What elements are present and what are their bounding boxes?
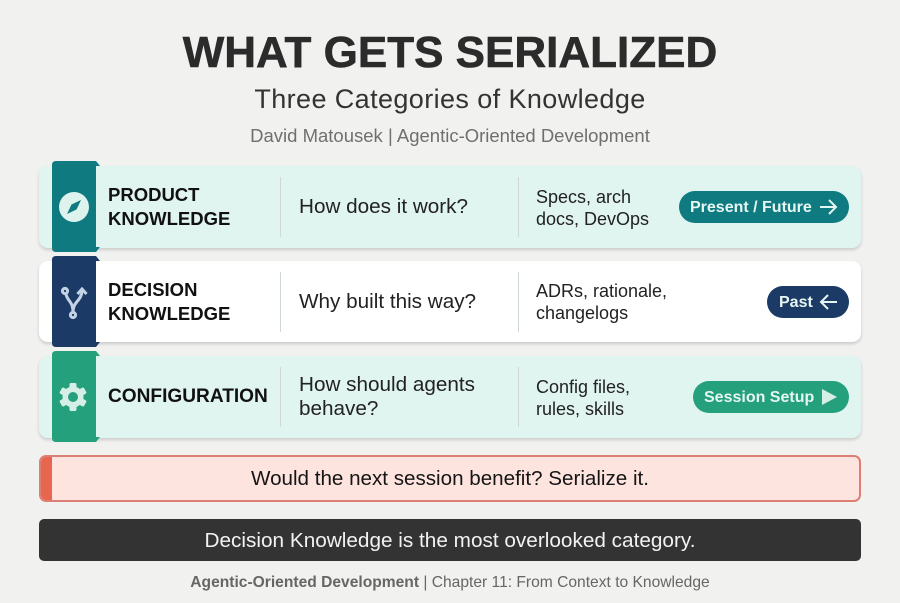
- artifacts: Config files,: [536, 377, 630, 397]
- category name: PRODUCT: [108, 184, 199, 205]
- badge: past: [767, 286, 849, 318]
- artifacts: [536, 187, 649, 229]
- artifacts: rules, skills: [536, 399, 624, 419]
- divider: [280, 272, 281, 332]
- panel: decision knowledge: [38, 256, 862, 347]
- artifacts: [536, 281, 667, 323]
- icon: branch: [60, 286, 88, 320]
- category name: DECISION: [108, 279, 197, 300]
- badge: session setup: [693, 381, 849, 413]
- author line: David Matousek | Agentic-Oriented Development: [250, 125, 650, 146]
- badge: present / future: [679, 191, 849, 223]
- artifacts: docs, DevOps: [536, 209, 649, 229]
- question: [299, 373, 475, 420]
- footer: Agentic-Oriented Development | Chapter 11: From Context to Knowledge: [190, 574, 710, 591]
- card background: [39, 261, 861, 342]
- card background: [39, 356, 861, 438]
- colour strip: [52, 161, 100, 252]
- category name: KNOWLEDGE: [108, 303, 230, 324]
- callout: serialize rule: [39, 455, 861, 502]
- panel: configuration: [38, 351, 862, 442]
- category name: KNOWLEDGE: [108, 208, 230, 229]
- divider: [280, 367, 281, 427]
- title: WHAT GETS SERIALIZED: [183, 28, 717, 77]
- panel: product knowledge: [38, 161, 862, 252]
- banner text: Decision Knowledge is the most overlooked category.: [205, 529, 695, 552]
- artifacts: changelogs: [536, 303, 628, 323]
- badge: session setup: Session Setup: [704, 389, 814, 406]
- divider: [518, 367, 519, 427]
- question: How does it work?: [299, 195, 468, 218]
- takeaway banner: [39, 519, 861, 561]
- divider: [280, 177, 281, 237]
- subtitle: Three Categories of Knowledge: [254, 84, 646, 114]
- category name: CONFIGURATION: [108, 386, 268, 407]
- divider: [518, 272, 519, 332]
- accent bar: [39, 455, 52, 506]
- badge: present / future: Present / Future: [690, 199, 812, 216]
- badge: past: Past: [779, 294, 813, 311]
- colour strip: [52, 256, 100, 347]
- question: behave?: [299, 397, 378, 420]
- category name: [108, 279, 230, 324]
- question: How should agents: [299, 373, 475, 396]
- artifacts: ADRs, rationale,: [536, 281, 667, 301]
- colour strip: [52, 351, 100, 442]
- icon: gear: [60, 383, 86, 411]
- callout text: Would the next session benefit? Serialize it.: [251, 467, 649, 490]
- card background: [39, 166, 861, 248]
- icon: compass: [59, 192, 89, 222]
- question: Why built this way?: [299, 290, 476, 313]
- artifacts: Specs, arch: [536, 187, 631, 207]
- artifacts: [536, 377, 630, 419]
- divider: [518, 177, 519, 237]
- category name: [108, 184, 230, 229]
